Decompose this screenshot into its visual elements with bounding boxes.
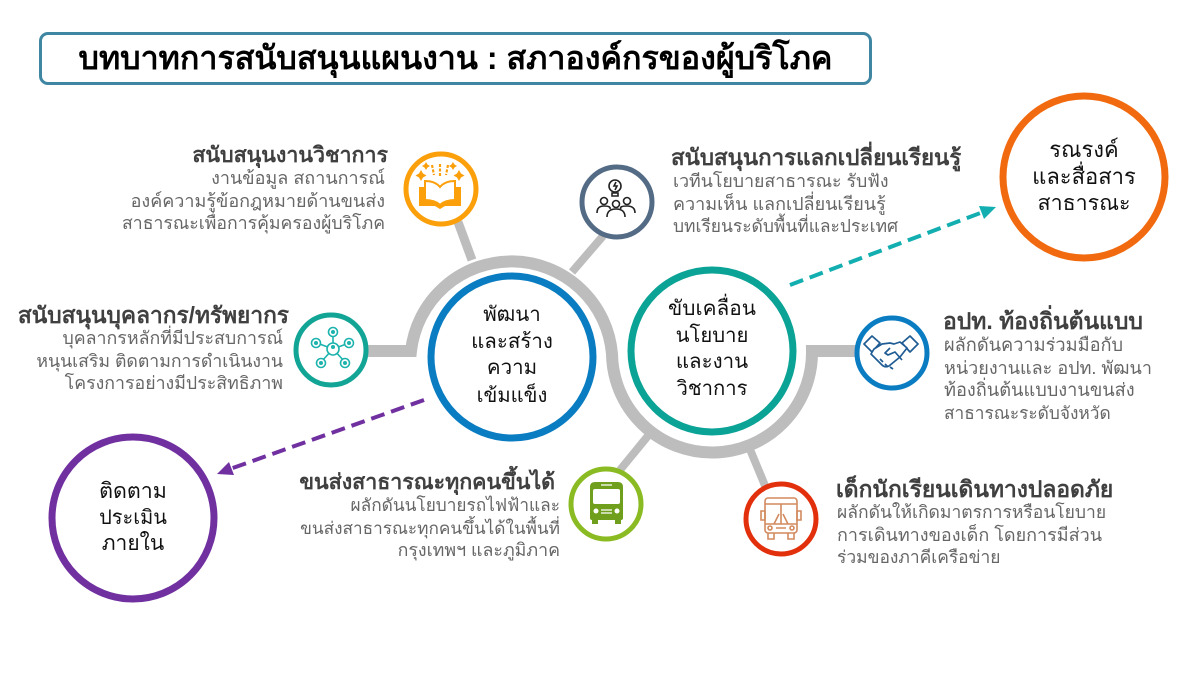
text block: safe student travel: เด็กนักเรียนเดินทางปลอดภัย — [836, 476, 1113, 502]
text block: public transport for all — [299, 466, 560, 560]
text block: model local government: ผลักดันความร่วมมือกับ — [944, 335, 1123, 355]
circle text: campaign: และสื่อสาร — [1032, 164, 1136, 188]
text block: academic support: สาธารณะเพื่อการคุ้มครองผู้บริโภค — [122, 213, 385, 233]
text block: public transport for all: ขนส่งสาธารณะทุกคนขึ้นได้ — [299, 470, 555, 494]
text block: safe student travel: การเดินทางของเด็ก โดยการมีส่วน — [837, 524, 1102, 544]
text block: personnel support: โครงการอย่างมีประสิทธิภาพ — [65, 373, 283, 393]
text block: model local government: สาธารณะระดับจังหวัด — [944, 402, 1111, 422]
hub text: teal — [668, 294, 756, 400]
text block: knowledge exchange: บทเรียนระดับพื้นที่และประเทศ — [673, 216, 898, 236]
text block: academic support: งานข้อมูล สถานการณ์ — [211, 168, 385, 188]
text block: model local government: อปท. ท้องถิ่นต้นแบบ — [943, 308, 1143, 334]
text block: personnel support: หนุนเสริม ติดตามการดำเนินงาน — [36, 350, 283, 370]
circle text: evaluation — [99, 479, 167, 555]
hub text: blue — [471, 303, 553, 406]
circle text: campaign: สาธารณะ — [1038, 191, 1130, 215]
hub text: teal: ขับเคลื่อน — [668, 297, 756, 320]
text block: safe student travel: ร่วมของภาคีเครือข่าย — [837, 547, 1000, 567]
text block: academic support: สนับสนุนงานวิชาการ — [192, 143, 388, 167]
text block: safe student travel — [836, 475, 1113, 567]
circle text: campaign: รณรงค์ — [1049, 137, 1119, 162]
text block: model local government: หน่วยงานและ อปท. พัฒนา — [944, 358, 1152, 378]
circle text: evaluation: ภายใน — [102, 532, 164, 555]
text block: public transport for all: กรุงเทพฯ และภูมิภาค — [398, 540, 560, 560]
text block: knowledge exchange: ความเห็น แลกเปลี่ยนเรียนรู้ — [673, 194, 886, 214]
hub text: teal: นโยบาย — [676, 324, 748, 346]
circle text: evaluation: ติดตาม — [99, 479, 167, 503]
text block: public transport for all: ขนส่งสาธารณะทุกคนขึ้นได้ในพื้นที่ — [300, 518, 560, 538]
hub text: blue: เข้มแข็ง — [477, 384, 547, 406]
text block: academic support — [122, 143, 388, 234]
text block: safe student travel: ผลักดันให้เกิดมาตรการหรือนโยบาย — [837, 502, 1106, 522]
circle text: evaluation: ประเมิน — [99, 506, 167, 528]
hub text: blue: พัฒนา — [483, 303, 541, 326]
title: บทบาทการสนับสนุนแผนงาน : สภาองค์กรของผู้บริโภค — [79, 40, 832, 76]
text block: academic support: องค์ความรู้ข้อกฎหมายด้านขนส่ง — [131, 190, 385, 210]
text block: personnel support: บุคลากรหลักที่มีประสบการณ์ — [62, 328, 283, 348]
text block: model local government — [943, 305, 1152, 422]
hub text: blue: และสร้าง — [471, 330, 553, 352]
title — [39, 32, 872, 85]
hub text: blue: ความ — [487, 356, 537, 379]
text block: knowledge exchange — [671, 142, 962, 236]
circle text: campaign — [1032, 137, 1136, 215]
text block: personnel support — [18, 302, 289, 393]
hub text: teal: วิชาการ — [676, 378, 748, 400]
hub text: teal: และงาน — [676, 350, 748, 373]
text block: model local government: ท้องถิ่นต้นแบบงานขนส่ง — [944, 380, 1135, 400]
text block: knowledge exchange: เวทีนโยบายสาธารณะ รับฟัง — [673, 171, 889, 191]
text block: public transport for all: ผลักดันนโยบายรถไฟฟ้าและ — [351, 495, 560, 515]
text block: personnel support: สนับสนุนบุคลากร/ทรัพยากร — [18, 302, 289, 328]
text block: knowledge exchange: สนับสนุนการแลกเปลี่ยนเรียนรู้ — [671, 145, 961, 170]
